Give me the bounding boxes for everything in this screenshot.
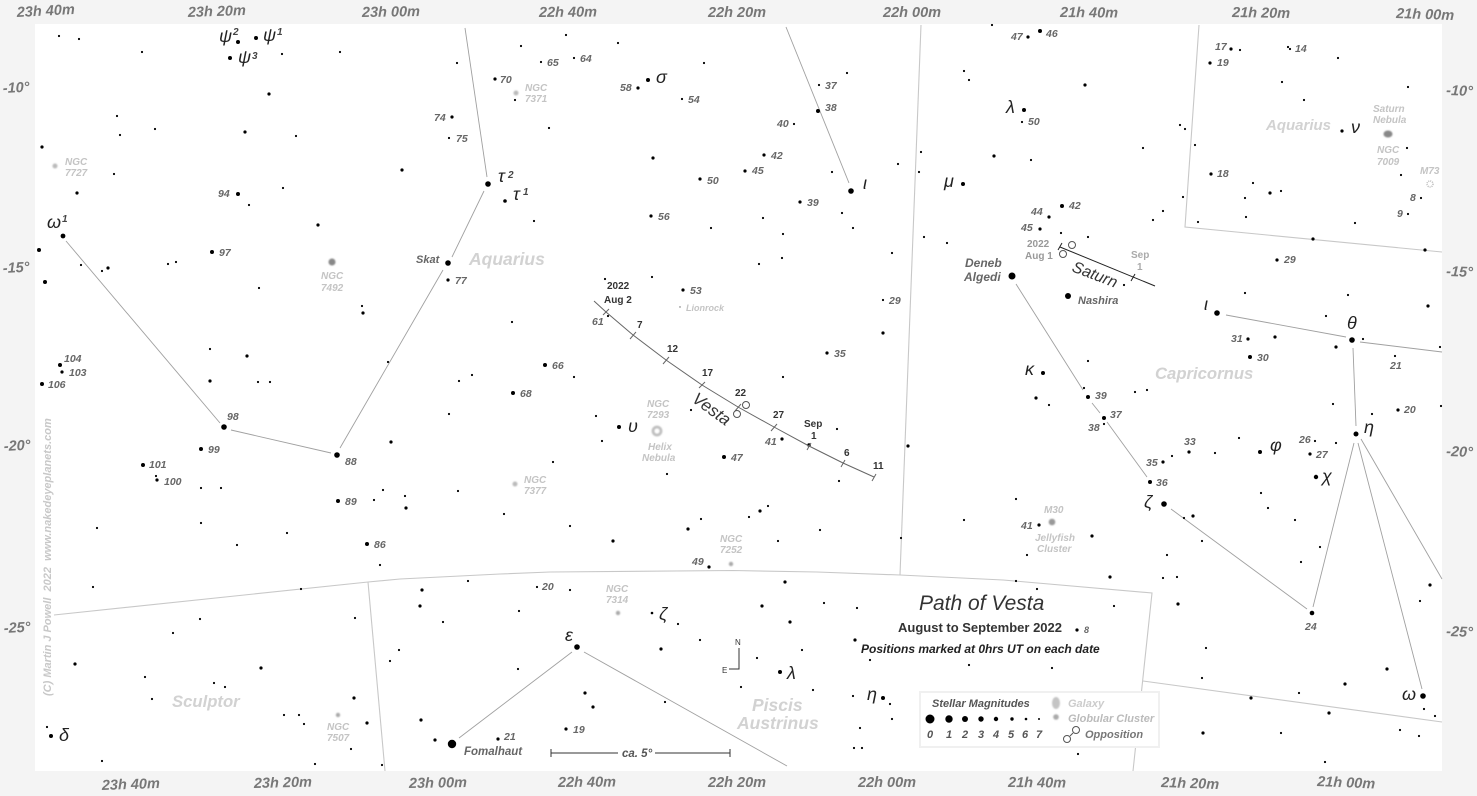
flamsteed star numbers: 17	[1215, 41, 1228, 53]
flamsteed star numbers: 19	[573, 724, 585, 736]
deep sky labels: 7371	[525, 94, 548, 105]
flamsteed star numbers: 106	[48, 379, 66, 391]
flamsteed star numbers: 19	[1217, 57, 1229, 69]
left declination scale	[2, 80, 31, 637]
title block: Path of Vesta	[919, 592, 1044, 615]
greek superscripts: 2	[232, 27, 239, 38]
legend: 5	[1008, 729, 1015, 741]
flamsteed star numbers: 100	[164, 476, 182, 488]
flamsteed star numbers: 75	[456, 133, 468, 145]
greek superscripts: 1	[523, 187, 529, 198]
vesta date labels: Aug 2	[604, 295, 632, 306]
bottom right ascension scale: 23h 40m	[101, 776, 160, 794]
flamsteed star numbers: 89	[345, 496, 357, 508]
vesta date labels	[604, 281, 884, 472]
left declination scale: -25°	[3, 620, 31, 637]
constellation names: Sculptor	[172, 692, 241, 711]
deep sky labels: Jellyfish	[1035, 533, 1075, 544]
legend: Galaxy	[1068, 698, 1105, 710]
vesta date labels: 17	[702, 368, 714, 379]
legend: Stellar Magnitudes	[932, 698, 1030, 710]
bottom right ascension scale	[101, 774, 1376, 794]
vesta date labels: 7	[637, 320, 643, 331]
compass: N	[735, 638, 741, 647]
flamsteed star numbers: 65	[547, 57, 559, 69]
flamsteed star numbers: 104	[64, 353, 82, 365]
flamsteed star numbers: 99	[208, 444, 220, 456]
deep sky objects	[52, 90, 1433, 717]
greek star labels: ω	[47, 212, 61, 232]
top right ascension scale: 23h 40m	[15, 2, 75, 21]
saturn date labels: 1	[1137, 262, 1143, 273]
deep sky labels: 7009	[1377, 157, 1400, 168]
top right ascension scale: 23h 20m	[187, 3, 246, 21]
left declination scale: -15°	[2, 260, 30, 277]
greek superscripts	[62, 27, 529, 225]
bottom right ascension scale: 23h 20m	[253, 774, 312, 792]
saturn date labels: 2022	[1027, 239, 1050, 250]
flamsteed star numbers: 49	[691, 556, 704, 568]
saturn date labels: Sep	[1131, 250, 1149, 261]
deep sky labels: NGC	[525, 83, 548, 94]
bottom right ascension scale: 21h 00m	[1316, 774, 1376, 793]
legend: 1	[946, 729, 952, 741]
greek star labels: δ	[59, 725, 70, 745]
deep sky labels: Helix	[648, 442, 672, 453]
saturn date labels	[1025, 239, 1149, 273]
constellation names: Capricornus	[1155, 364, 1253, 383]
flamsteed star numbers: 41	[764, 436, 777, 448]
vesta date labels: 1	[811, 431, 817, 442]
greek star labels: λ	[786, 663, 796, 683]
top right ascension scale: 21h 00m	[1395, 6, 1455, 24]
greek star labels: ζ	[659, 604, 669, 624]
scale bar: ca. 5°	[622, 748, 653, 760]
flamsteed star numbers: 20	[1403, 404, 1416, 416]
deep sky labels: M30	[1044, 505, 1064, 516]
flamsteed star numbers: 38	[1088, 422, 1100, 434]
legend	[920, 692, 1159, 747]
flamsteed star numbers: 18	[1217, 168, 1229, 180]
greek star labels: φ	[1270, 435, 1282, 455]
deep sky labels: NGC	[65, 157, 88, 168]
legend: 7	[1036, 729, 1043, 741]
flamsteed star numbers: 88	[345, 456, 357, 468]
flamsteed star numbers: 64	[580, 53, 592, 65]
deep sky labels: 7377	[524, 486, 547, 497]
title block	[861, 592, 1100, 656]
title block: Positions marked at 0hrs UT on each date	[861, 642, 1100, 656]
legend: 4	[992, 729, 999, 741]
greek star labels: υ	[628, 416, 638, 436]
flamsteed star numbers: 35	[1146, 457, 1158, 469]
flamsteed star numbers: 56	[658, 211, 670, 223]
deep sky labels: Nebula	[642, 453, 676, 464]
flamsteed star numbers: 8	[1084, 625, 1089, 635]
flamsteed star numbers: 35	[834, 348, 846, 360]
greek star labels: ψ	[263, 25, 276, 45]
flamsteed star numbers: 47	[730, 452, 744, 464]
legend: 2	[961, 729, 968, 741]
greek star labels: ω	[1402, 684, 1416, 704]
flamsteed star numbers: 29	[888, 295, 901, 307]
deep sky labels: NGC	[1377, 145, 1400, 156]
top right ascension scale	[15, 2, 1455, 24]
greek superscripts: 1	[277, 27, 283, 38]
named stars labels: Algedi	[963, 270, 1001, 284]
flamsteed star numbers: 21	[1389, 360, 1402, 372]
flamsteed star numbers: 77	[455, 275, 468, 287]
flamsteed star numbers: 26	[1298, 434, 1311, 446]
flamsteed star numbers: 70	[500, 74, 512, 86]
saturn path: Saturn	[1070, 259, 1120, 292]
legend: 6	[1022, 729, 1029, 741]
compass: E	[722, 666, 727, 675]
vesta path	[594, 301, 876, 481]
deep sky labels: Nebula	[1373, 115, 1407, 126]
flamsteed star numbers: 14	[1295, 43, 1307, 55]
flamsteed star numbers: 53	[690, 285, 702, 297]
flamsteed star numbers: 27	[1315, 449, 1329, 461]
deep sky labels: 7507	[327, 733, 350, 744]
bottom right ascension scale: 21h 40m	[1007, 775, 1066, 792]
right declination scale	[1446, 83, 1473, 641]
legend: 3	[978, 729, 984, 741]
top right ascension scale: 22h 00m	[882, 5, 941, 21]
top right ascension scale: 21h 20m	[1231, 5, 1290, 22]
deep sky labels: Saturn	[1373, 104, 1405, 115]
bottom right ascension scale: 21h 20m	[1160, 775, 1220, 793]
vesta date labels: 6	[844, 448, 850, 459]
flamsteed star numbers: 101	[149, 459, 167, 471]
flamsteed star numbers: 86	[374, 539, 386, 551]
greek star labels: ζ	[1144, 492, 1154, 512]
vesta date labels: 27	[773, 410, 785, 421]
flamsteed star numbers: 33	[1184, 436, 1196, 448]
right declination scale: -25°	[1446, 624, 1473, 641]
greek star labels: σ	[656, 67, 668, 87]
deep sky labels	[65, 83, 1440, 744]
deep sky labels: NGC	[321, 271, 344, 282]
named stars labels	[416, 254, 1118, 758]
greek star labels: ψ	[219, 26, 232, 46]
bottom right ascension scale: 22h 20m	[707, 775, 766, 791]
legend: Globular Cluster	[1068, 713, 1155, 725]
greek star labels: ι	[863, 173, 867, 193]
deep sky labels: 7252	[720, 545, 743, 556]
flamsteed star numbers: 39	[807, 197, 819, 209]
vesta date labels: 2022	[607, 281, 630, 292]
flamsteed star numbers: 8	[1410, 192, 1416, 204]
flamsteed star numbers: 50	[707, 175, 719, 187]
greek star labels: η	[1364, 417, 1374, 437]
deep sky labels: 7492	[321, 283, 344, 294]
deep sky labels: 7727	[65, 168, 88, 179]
flamsteed star numbers: 41	[1020, 520, 1033, 532]
top right ascension scale: 22h 20m	[707, 5, 766, 21]
greek superscripts: 1	[62, 214, 68, 225]
legend: Opposition	[1085, 729, 1143, 741]
greek star labels: ψ	[238, 47, 251, 67]
saturn date labels: Aug 1	[1025, 251, 1053, 262]
constellation names: Aquarius	[468, 249, 545, 269]
flamsteed star numbers: 38	[825, 102, 837, 114]
named bright stars	[61, 181, 1426, 748]
flamsteed star numbers: 30	[1257, 352, 1269, 364]
vesta date labels: 22	[735, 388, 747, 399]
deep sky labels: M73	[1420, 166, 1440, 177]
vesta path: Vesta	[689, 389, 734, 429]
flamsteed star numbers: 94	[218, 188, 230, 200]
flamsteed star numbers: 46	[1045, 28, 1058, 40]
left declination scale: -10°	[2, 80, 30, 97]
named stars labels: Skat	[416, 254, 441, 266]
deep sky labels: 7314	[606, 595, 629, 606]
greek star labels: η	[867, 684, 877, 704]
deep sky labels: NGC	[647, 399, 670, 410]
flamsteed star numbers: 54	[688, 94, 700, 106]
flamsteed star numbers: 20	[541, 581, 554, 593]
flamsteed star numbers: 98	[227, 411, 239, 423]
constellation names: Aquarius	[1265, 117, 1331, 134]
named stars labels: Deneb	[965, 256, 1002, 270]
flamsteed star numbers: 21	[503, 731, 516, 743]
greek star labels: ι	[1204, 294, 1208, 314]
right declination scale: -10°	[1446, 83, 1473, 100]
flamsteed star numbers: 36	[1156, 477, 1168, 489]
flamsteed star numbers: 47	[1010, 31, 1024, 43]
greek superscripts: 2	[507, 170, 514, 181]
flamsteed star numbers: 37	[1110, 409, 1123, 421]
constellation names	[172, 117, 1331, 733]
named stars labels: Fomalhaut	[464, 746, 523, 758]
greek star labels: λ	[1005, 97, 1015, 117]
flamsteed star numbers: 50	[1028, 116, 1040, 128]
flamsteed star numbers: 39	[1095, 390, 1107, 402]
vesta date labels: 11	[873, 461, 884, 472]
bottom right ascension scale: 22h 40m	[557, 774, 616, 791]
greek superscripts: 3	[252, 51, 258, 62]
deep sky labels: NGC	[606, 584, 629, 595]
flamsteed star numbers: 45	[1020, 222, 1033, 234]
greek star labels: τ	[513, 184, 521, 204]
flamsteed star numbers: 44	[1030, 206, 1043, 218]
bottom right ascension scale: 22h 00m	[857, 775, 916, 791]
vesta date labels: Sep	[804, 419, 822, 430]
saturn path	[1058, 242, 1155, 292]
deep sky labels: 7293	[647, 410, 670, 421]
compass	[722, 638, 741, 675]
deep sky labels: NGC	[327, 722, 350, 733]
scale bar	[551, 748, 730, 760]
right declination scale: -15°	[1446, 264, 1473, 281]
flamsteed star numbers: 61	[592, 316, 604, 328]
top right ascension scale: 21h 40m	[1059, 5, 1118, 22]
flamsteed star numbers: 37	[825, 80, 838, 92]
deep sky labels: Lionrock	[686, 303, 725, 313]
greek star labels: μ	[943, 171, 954, 191]
flamsteed star numbers: 42	[1068, 200, 1081, 212]
flamsteed star numbers: 42	[770, 150, 783, 162]
greek star labels: θ	[1347, 313, 1357, 333]
named stars labels: Nashira	[1078, 295, 1118, 307]
bottom right ascension scale: 23h 00m	[408, 775, 467, 792]
flamsteed star numbers: 9	[1397, 208, 1403, 220]
greek star labels: τ	[498, 166, 506, 186]
deep sky labels: NGC	[524, 475, 547, 486]
flamsteed star numbers: 103	[69, 367, 87, 379]
constellation names: Austrinus	[736, 713, 819, 733]
greek star labels: ε	[565, 625, 574, 645]
left declination scale: -20°	[3, 438, 31, 455]
flamsteed star numbers: 97	[219, 247, 232, 259]
flamsteed star numbers: 74	[434, 112, 446, 124]
copyright note: (C) Martin J Powell 2022 www.nakedeyeplanets.com	[42, 418, 54, 696]
greek star labels: χ	[1320, 466, 1333, 486]
greek star labels: ν	[1351, 117, 1360, 137]
top right ascension scale: 23h 00m	[361, 4, 420, 21]
flamsteed star numbers: 66	[552, 360, 564, 372]
deep sky labels: Cluster	[1037, 544, 1073, 555]
title block: August to September 2022	[898, 620, 1062, 635]
vesta date labels: 12	[667, 344, 679, 355]
flamsteed star numbers: 68	[520, 388, 532, 400]
flamsteed star numbers: 45	[751, 165, 764, 177]
flamsteed star numbers: 58	[620, 82, 632, 94]
flamsteed star numbers: 24	[1304, 621, 1317, 633]
constellation names: Piscis	[752, 695, 803, 715]
flamsteed star numbers: 29	[1283, 254, 1296, 266]
right declination scale: -20°	[1446, 444, 1473, 461]
legend: 0	[927, 729, 934, 741]
top right ascension scale: 22h 40m	[538, 4, 597, 21]
greek star labels: κ	[1025, 359, 1035, 379]
flamsteed star numbers: 31	[1231, 333, 1243, 345]
flamsteed star numbers: 40	[776, 118, 789, 130]
deep sky labels: NGC	[720, 534, 743, 545]
